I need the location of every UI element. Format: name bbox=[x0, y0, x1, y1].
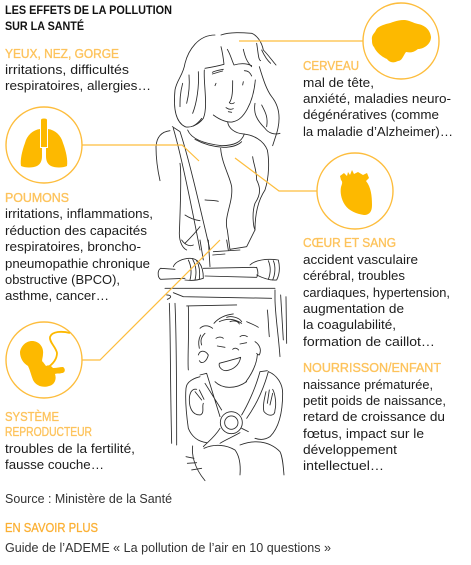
panel: lungs: pneumopathie chronique bbox=[5, 256, 150, 271]
panel: reproductive system: fausse couche… bbox=[5, 457, 104, 472]
panel: heart and blood bbox=[303, 235, 450, 349]
panel: eyes, nose, throat: YEUX, NEZ, GORGE bbox=[5, 46, 119, 61]
panel: brain bbox=[303, 58, 453, 139]
title: SUR LA SANTÉ bbox=[5, 18, 84, 33]
panel: infant and child: fœtus, impact sur le bbox=[303, 426, 424, 441]
panel: brain: mal de tête, bbox=[303, 75, 374, 90]
panel: reproductive system bbox=[5, 409, 135, 472]
panel: infant and child: naissance prématurée, bbox=[303, 377, 433, 392]
woman upper body bbox=[156, 33, 280, 250]
icon: heart bbox=[317, 153, 393, 229]
panel: brain: la maladie d’Alzheimer)… bbox=[303, 124, 453, 139]
panel: heart and blood: la coagulabilité, bbox=[303, 317, 396, 332]
panel: infant and child: NOURRISSON/ENFANT bbox=[303, 360, 441, 375]
illustration: woman carrying a baby bbox=[156, 33, 287, 481]
title: LES EFFETS DE LA POLLUTION bbox=[5, 3, 172, 17]
panel: heart and blood: cérébral, troubles bbox=[303, 268, 405, 283]
further reading: EN SAVOIR PLUS bbox=[5, 521, 98, 535]
panel: heart and blood: formation de caillot… bbox=[303, 334, 435, 349]
connector: heart bbox=[235, 158, 317, 191]
panel: infant and child: retard de croissance du bbox=[303, 409, 445, 424]
panel: brain: anxiété, maladies neuro- bbox=[303, 91, 451, 106]
panel: heart and blood: augmentation de bbox=[303, 301, 404, 316]
panel: infant and child: petit poids de naissance, bbox=[303, 393, 446, 408]
icon: embryo bbox=[6, 322, 82, 398]
connector: brain bbox=[239, 40, 363, 42]
panel: lungs: obstructive (BPCO), bbox=[5, 272, 120, 287]
panel: reproductive system: REPRODUCTEUR bbox=[5, 424, 92, 439]
connector: lungs bbox=[82, 145, 199, 161]
panel: brain: CERVEAU bbox=[303, 58, 359, 73]
panel: infant and child: développement bbox=[303, 442, 397, 457]
panel: eyes, nose, throat bbox=[5, 46, 151, 93]
panel: infant and child bbox=[303, 360, 446, 473]
panel: lungs: réduction des capacités bbox=[5, 223, 148, 238]
further reading: Guide de l’ADEME « La pollution de l’air en 10 questions » bbox=[5, 541, 331, 555]
panel: lungs: POUMONS bbox=[5, 190, 69, 205]
panel: lungs: irritations, inflammations, bbox=[5, 206, 153, 221]
panel: heart and blood: CŒUR ET SANG bbox=[303, 235, 396, 250]
panel: eyes, nose, throat: respiratoires, allergies… bbox=[5, 78, 151, 93]
panel: heart and blood: accident vasculaire bbox=[303, 252, 418, 267]
panel: infant and child: intellectuel… bbox=[303, 458, 384, 473]
panel: heart and blood: cardiaques, hypertension, bbox=[303, 285, 450, 300]
panel: lungs: asthme, cancer… bbox=[5, 288, 109, 303]
connector: reproductive system bbox=[82, 240, 220, 360]
panel: eyes, nose, throat: irritations, difficultés bbox=[5, 62, 130, 77]
source: Source : Ministère de la Santé bbox=[5, 492, 172, 506]
panel: brain: dégénératives (comme bbox=[303, 107, 439, 122]
panel: reproductive system: SYSTÈME bbox=[5, 409, 59, 424]
title bbox=[5, 3, 172, 33]
icon: brain bbox=[363, 3, 439, 79]
arms, window frame and baby bbox=[158, 240, 287, 481]
panel: reproductive system: troubles de la fertilité, bbox=[5, 441, 135, 456]
icon: lungs bbox=[6, 107, 82, 183]
panel: lungs bbox=[5, 190, 153, 303]
further reading bbox=[5, 521, 331, 555]
panel: lungs: respiratoires, broncho- bbox=[5, 239, 141, 254]
